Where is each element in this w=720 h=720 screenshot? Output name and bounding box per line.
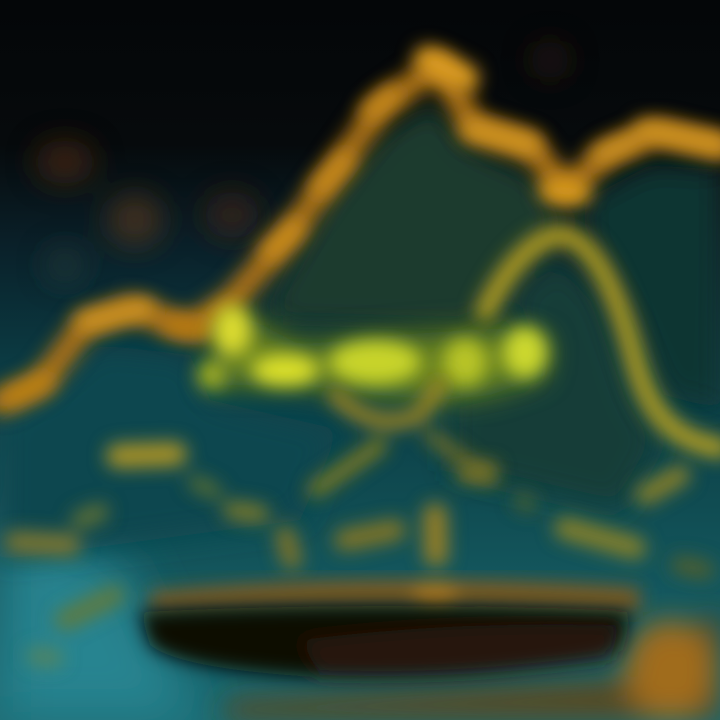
main line segments [10, 60, 720, 398]
yellow blobs [198, 304, 547, 389]
main gold chart line [0, 65, 720, 402]
area under the chart line [0, 100, 720, 560]
faint background dots top left [35, 40, 570, 283]
second curve [485, 235, 720, 448]
lower dashed gold series [15, 454, 705, 658]
bowl: dark body [140, 606, 630, 678]
yellow highlight band [205, 310, 548, 400]
bowl: warm bottom ground [220, 610, 720, 720]
crossing gold strokes in the centre [315, 385, 490, 490]
glow: teal lower left [0, 430, 200, 720]
bowl: rim [150, 580, 640, 612]
